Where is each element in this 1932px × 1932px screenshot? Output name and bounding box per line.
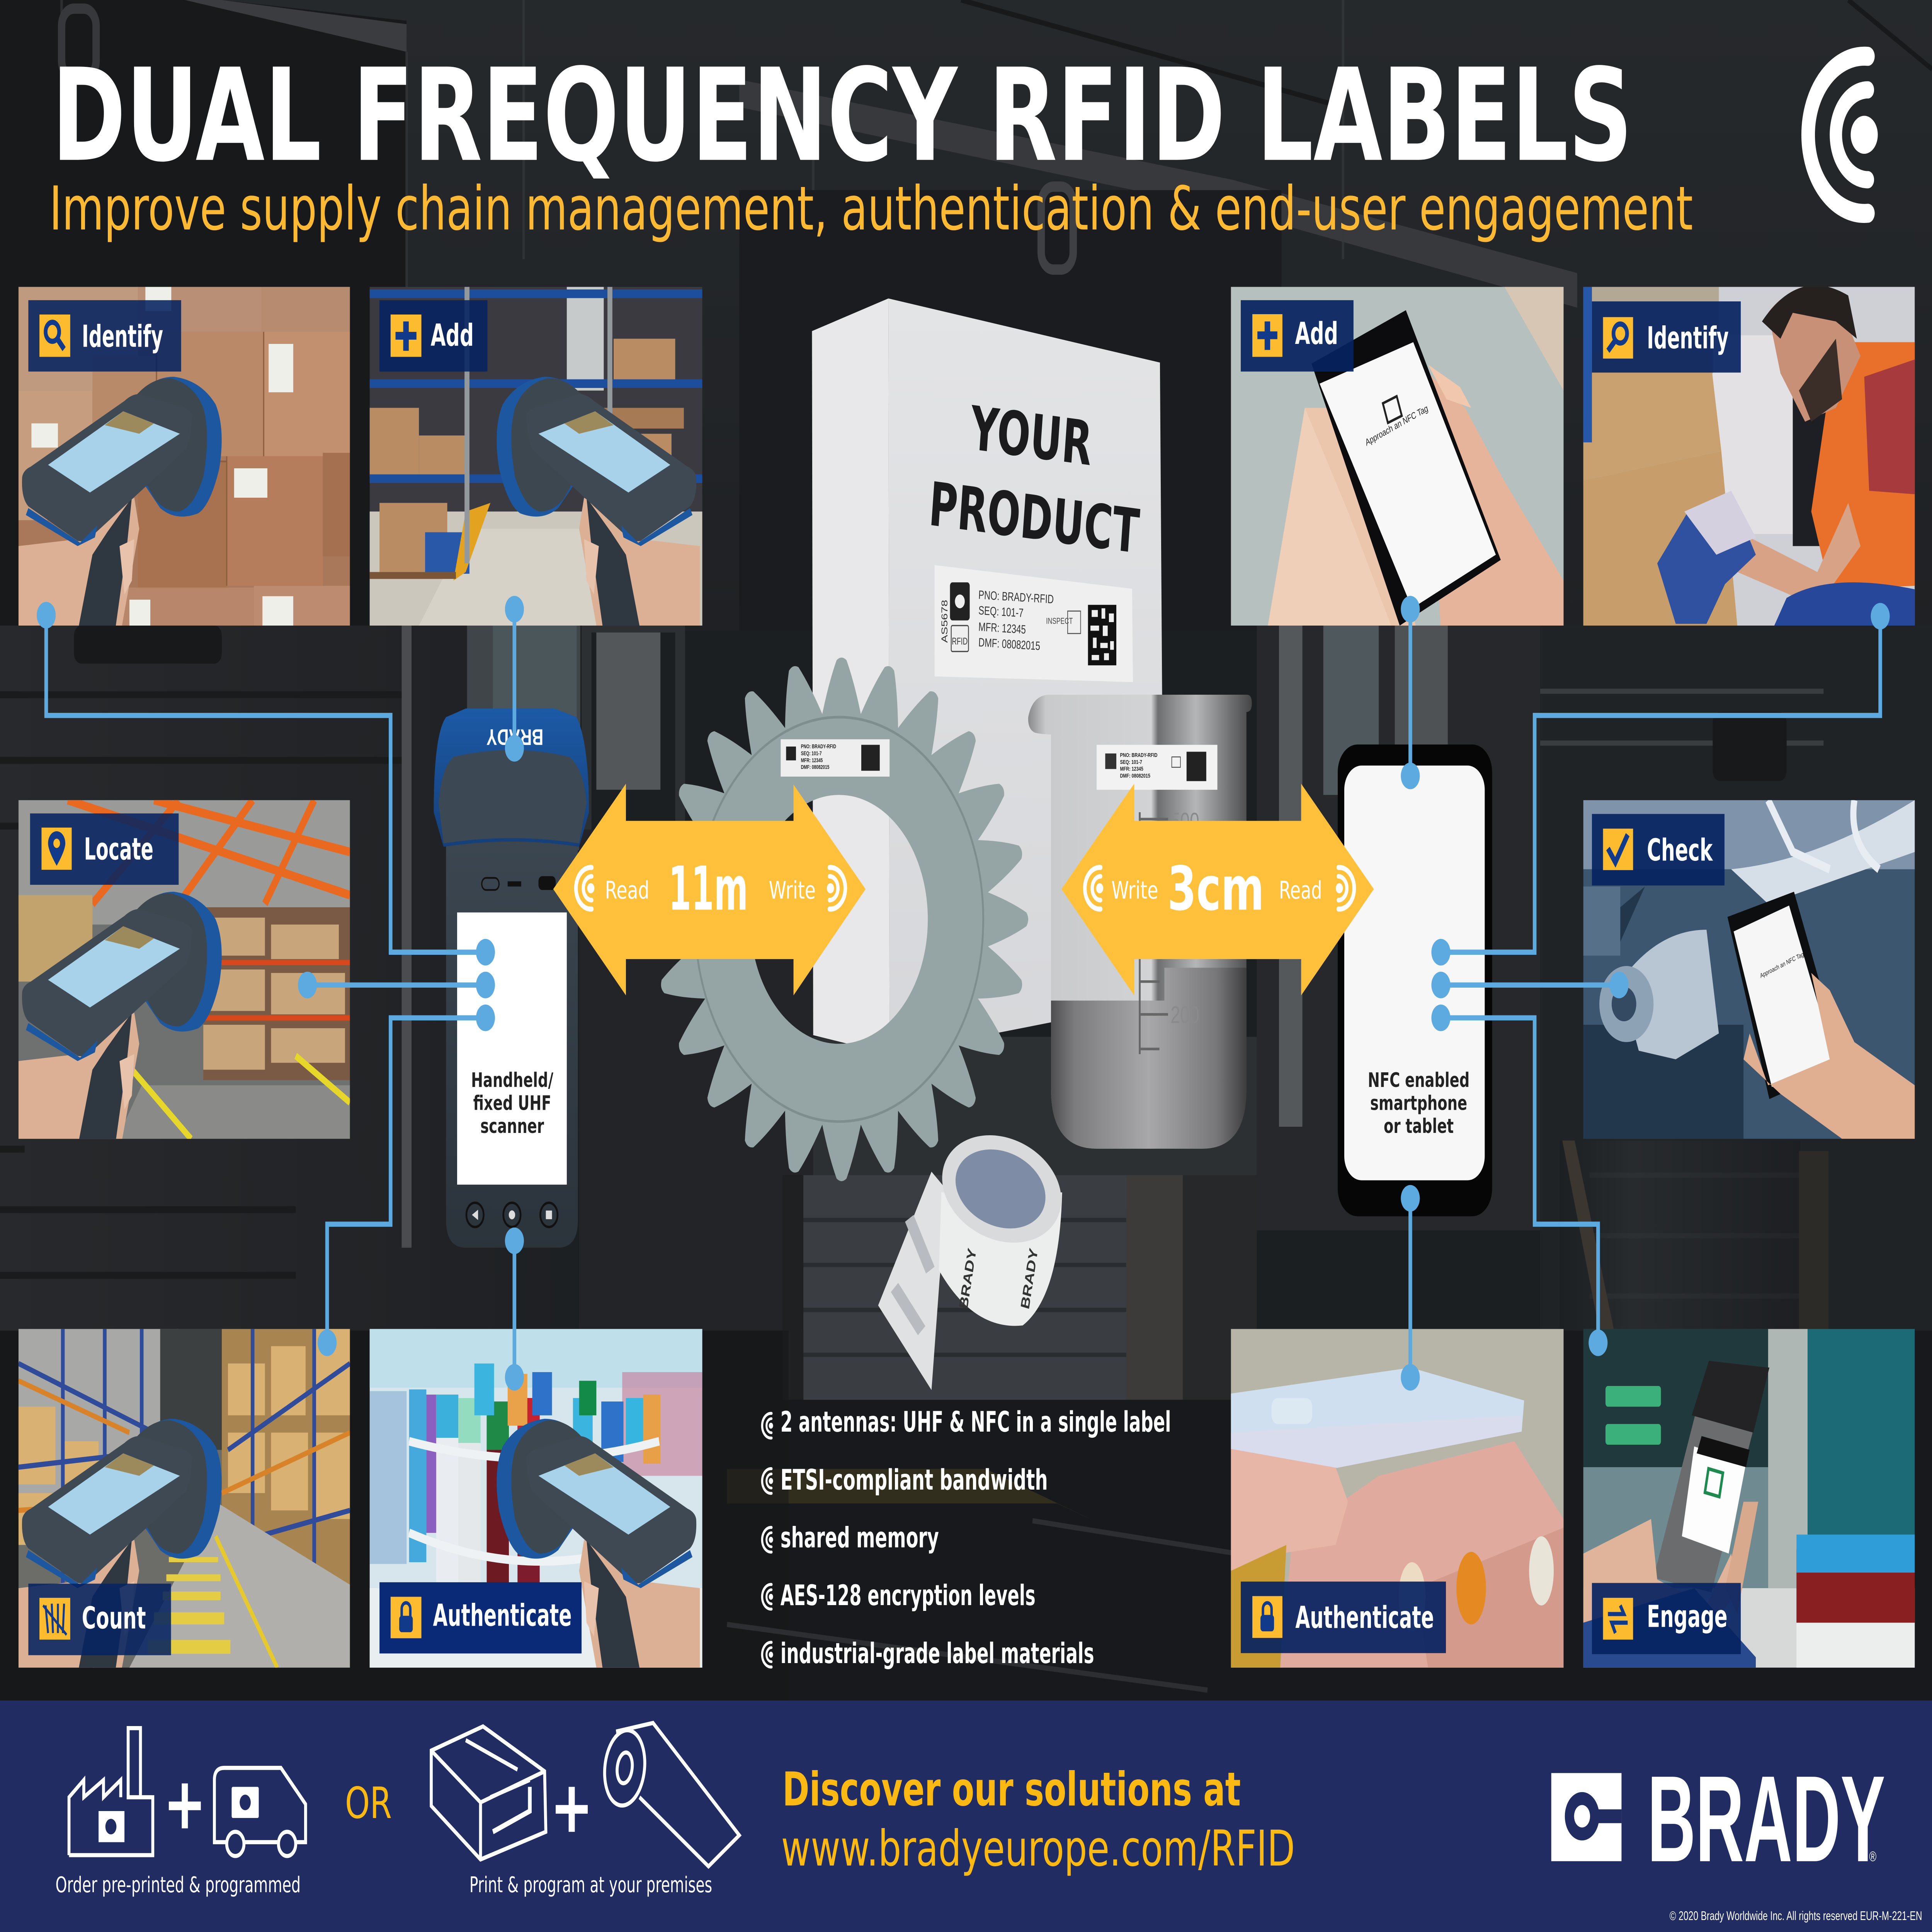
beaker scale: 500 [1170, 808, 1199, 835]
icon: RFID waves logo [1808, 56, 1878, 213]
photo: check engine [1583, 800, 1915, 1139]
call to action: Discover our solutions at [782, 1762, 1241, 1817]
call to action: www.bradyeurope.com/RFID [781, 1820, 1295, 1878]
feature 3: shared memory [781, 1522, 939, 1554]
caption: print: Print & program at your premises [469, 1873, 712, 1898]
scanner screen [457, 912, 567, 1185]
tag: Count: Count [82, 1601, 146, 1636]
tag: Locate [30, 813, 179, 885]
product name: YOUR [968, 393, 1094, 480]
product name: PRODUCT [927, 469, 1141, 568]
tag: Engage: Engage [1647, 1599, 1728, 1634]
title: DUAL FREQUENCY RFID LABELS [52, 41, 1633, 190]
arrow: NFC 3cm write read: Read [1279, 876, 1322, 905]
tag: Identify left: Identify [82, 319, 163, 354]
feature 1: 2 antennas: UHF & NFC in a single label [781, 1406, 1171, 1439]
tag: Check: Check [1647, 833, 1713, 868]
logo: Brady [1551, 1750, 1885, 1888]
phone caption: NFC enabled [1368, 1068, 1469, 1092]
arrow: NFC 3cm write read [1061, 784, 1374, 995]
feature 5: industrial-grade label materials [781, 1637, 1094, 1670]
icon: van [214, 1768, 306, 1856]
arrow: NFC 3cm write read: Write [1111, 876, 1158, 905]
copyright: © 2020 Brady Worldwide Inc. All rights reserved EUR-M-221-EN [1670, 1909, 1922, 1923]
photo: engage phone lab [1583, 1329, 1915, 1668]
arrow: UHF 11m read write [553, 784, 866, 995]
tag: Engage [1592, 1583, 1741, 1654]
tag: Locate: Locate [84, 832, 153, 867]
tag: Check [1592, 814, 1725, 886]
panel: NFC smartphone [1338, 745, 1492, 1216]
beaker label [1097, 745, 1218, 790]
photo: check engine: Approach an NFC Tag [1759, 951, 1804, 980]
icon: factory [69, 1728, 153, 1855]
scanner caption: fixed UHF [473, 1091, 551, 1115]
gear label: MFR: 12345 [801, 757, 823, 764]
phone screen [1344, 765, 1485, 1180]
tag: Authenticate right [1241, 1582, 1446, 1653]
photo: add warehouse [370, 287, 702, 626]
photo: locate warehouse [19, 800, 350, 1141]
box label: DMF: 08082015 [978, 635, 1041, 653]
product name [927, 393, 1141, 568]
panel: label roll: BRADY [957, 1247, 979, 1311]
tag: Authenticate right: Authenticate [1295, 1600, 1434, 1636]
panel: product box [812, 298, 1164, 1054]
feature 2: ETSI-compliant bandwidth [781, 1464, 1048, 1497]
caption: order: Order pre-printed & programmed [55, 1873, 301, 1898]
panel: label roll [878, 1121, 1068, 1390]
box label: MFR: 12345 [978, 620, 1026, 636]
panel: label roll: BRADY [1018, 1247, 1041, 1311]
icon: label printer [431, 1726, 546, 1859]
box label: AS5678 [940, 600, 949, 643]
footer band [0, 1701, 1932, 1932]
tag: Authenticate left: Authenticate [433, 1598, 572, 1633]
photo: identify worker [1583, 285, 1915, 626]
photo: add smartphone: Approach an NFC Tag [1364, 403, 1429, 448]
tag: Add left [379, 300, 487, 372]
plus [169, 1783, 201, 1828]
plus [556, 1787, 588, 1832]
beaker scale [1140, 808, 1199, 1054]
beaker scale: 200 [1170, 1001, 1199, 1028]
scanner caption: scanner [480, 1114, 544, 1138]
arrow: UHF 11m read write: 11m [668, 854, 748, 924]
feature 4: AES-128 encryption levels [781, 1579, 1036, 1612]
icon: label tape roll [600, 1723, 739, 1866]
callouts: connector dots [37, 596, 1890, 1391]
beaker label: PNO: BRADY-RFID [1120, 752, 1157, 758]
scanner caption: Handheld/ [471, 1068, 553, 1092]
scanner caption [471, 1068, 553, 1138]
photo: count warehouse [19, 1329, 350, 1668]
panel: handheld scanner: BRADY [486, 724, 543, 750]
panel: metal gear [655, 658, 1028, 1181]
gear label [781, 739, 889, 777]
gear label: SEQ: 101-7 [801, 750, 822, 757]
tag: Add left: Add [430, 318, 474, 353]
box label: PNO: BRADY-RFID [978, 588, 1054, 606]
beaker label: DMF: 08082015 [1120, 772, 1150, 779]
photo: authenticate pill pack [1231, 1329, 1564, 1668]
box label: SEQ: 101-7 [978, 603, 1024, 620]
panel: handheld scanner [434, 709, 589, 1248]
panel: beaker [1028, 695, 1252, 1149]
box label: INSPECT [1046, 616, 1073, 626]
gear label: DMF: 08082015 [801, 764, 829, 770]
arrow: UHF 11m read write: Read [605, 876, 649, 905]
beaker label: MFR: 12345 [1120, 765, 1143, 772]
tag: Identify left [28, 300, 181, 372]
feature list [762, 1406, 1171, 1670]
subtitle: Improve supply chain management, authentication & end-user engagement [49, 174, 1693, 244]
tag: Identify right [1592, 301, 1741, 372]
callouts: connector lines [46, 608, 1880, 1377]
scanner buttons [466, 1203, 558, 1227]
phone caption [1368, 1068, 1469, 1138]
arrow: NFC 3cm write read: 3cm [1167, 854, 1264, 924]
tag: Authenticate left [379, 1582, 582, 1653]
arrow: UHF 11m read write: Write [769, 876, 816, 905]
logo: Brady: ® [1869, 1849, 1876, 1864]
photo: add smartphone [1231, 287, 1564, 626]
tag: Identify right: Identify [1647, 321, 1729, 356]
phone caption: smartphone [1370, 1091, 1467, 1115]
box label: RFID [952, 636, 968, 647]
phone caption: or tablet [1384, 1114, 1454, 1138]
tag: Add right: Add [1295, 316, 1338, 352]
call to action [781, 1762, 1295, 1878]
OR: OR [345, 1778, 392, 1828]
photo: identify boxes [19, 287, 350, 626]
beaker label: SEQ: 101-7 [1120, 759, 1142, 765]
box label [935, 565, 1133, 682]
gear label: PNO: BRADY-RFID [801, 743, 836, 750]
tag: Count [28, 1583, 171, 1655]
photo: authenticate tubes [370, 1329, 702, 1668]
tag: Add right [1241, 300, 1354, 372]
